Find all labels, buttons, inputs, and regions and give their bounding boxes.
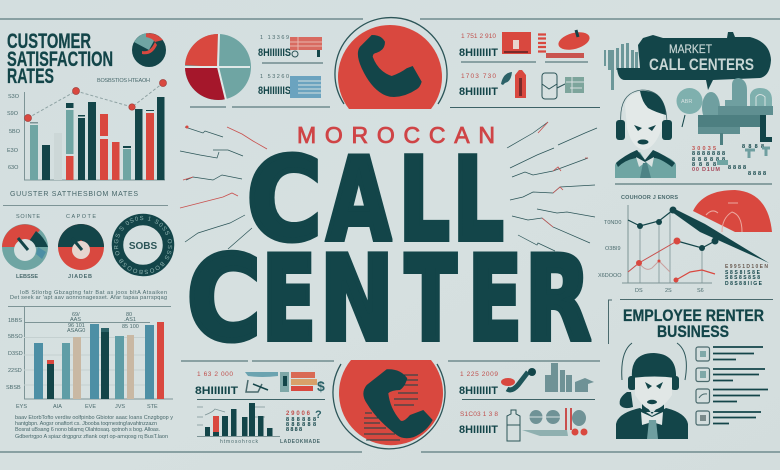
- panel: grouped bar chart: .AS1: [124, 317, 136, 323]
- panel: employee renter business: [608, 300, 773, 439]
- panel: donut charts: SOINTE: [16, 214, 40, 220]
- panel: bottom-right stats: 8HIIIIIIT: [459, 424, 498, 436]
- dot legend: 888888: [286, 417, 316, 423]
- icon: male agent: [615, 90, 676, 178]
- panel: right line chart: E9951D10EN: [725, 264, 768, 270]
- title: Center: C: [187, 232, 261, 367]
- dot legend: 888888: [286, 422, 316, 428]
- panel: donut charts: CAPOTE: [66, 214, 96, 220]
- heading: BUSINESS: [657, 322, 729, 341]
- panel: grouped bar chart: SBSB: [6, 385, 21, 391]
- panel: grouped bar chart: 69/: [72, 312, 80, 318]
- panel: grouped bar chart: EVE: [85, 404, 96, 410]
- panel: grouped bar chart: 85 100: [122, 324, 139, 330]
- speech bubble: MARKET: [669, 42, 713, 56]
- paragraph: Bosrat uBsang 6 nono bilamq Olahtosaq. qotnoh s bog. Alloas.: [15, 427, 160, 433]
- panel: donut charts: [2, 214, 174, 301]
- panel: top pie: [185, 34, 251, 100]
- title: Center: T: [405, 232, 457, 367]
- panel: market call centers: [604, 32, 773, 177]
- panel: grouped bar chart: AIA: [53, 404, 62, 410]
- panel: right line chart: S8S8S8S8: [725, 275, 760, 281]
- legend dots: 8888: [728, 165, 746, 171]
- icon: red cart: [290, 37, 322, 57]
- panel: grouped bar chart: 80: [126, 312, 132, 318]
- panel: grouped bar chart: 96 101: [68, 323, 85, 329]
- icon: bottle and capsules: [507, 408, 588, 441]
- bar chart: S9O: [7, 111, 19, 117]
- zigzag accents right: [507, 122, 597, 251]
- panel: top-left stats: 8HIIIIIIS: [258, 47, 291, 59]
- checklist: [696, 347, 768, 425]
- title: Call: A: [327, 134, 390, 266]
- title: Center: E: [468, 232, 522, 367]
- title: Call: L: [453, 134, 503, 266]
- panel: right line chart: 2S: [665, 288, 672, 294]
- panel: bottom-right stats: S1C03 1 3 8: [460, 411, 498, 418]
- title: Center: R: [525, 232, 591, 367]
- paragraph: hantgbpn. Aogsr onaftort cs. Jbooba toqrnestng!avahtnzzazn: [15, 421, 157, 427]
- icon: red card: [502, 32, 531, 54]
- heading: SATISFACTION: [7, 48, 113, 71]
- panel: grouped bar chart: EYS: [16, 404, 27, 410]
- icon: top phone badge: [335, 18, 447, 109]
- legend dots: 8888: [742, 144, 764, 150]
- red gauge: [693, 190, 772, 232]
- text block: Det seek ar 'apt aav aonnonagesset. Afar tapaa parrspqag: [10, 295, 167, 301]
- speech bubble: CALL CENTERS: [649, 55, 754, 74]
- skyline: [604, 43, 638, 90]
- ring with total: [112, 214, 174, 276]
- icon: bottle: [501, 70, 526, 98]
- teal machinery: ABR: [681, 99, 692, 105]
- panel: right line chart: S8S8IS8E: [725, 270, 761, 276]
- title: Call: C: [247, 134, 322, 266]
- mini bar chart: [197, 403, 321, 445]
- title: Moroccan: MOROCCAN: [297, 122, 495, 148]
- panel: top-right stats: [450, 29, 600, 108]
- panel: right line chart: [598, 190, 772, 294]
- mini bar chart: LADEOKMADE: [280, 439, 321, 445]
- icon: machine: [245, 372, 325, 394]
- panel: grouped bar chart: 5BSO: [8, 334, 23, 340]
- legend dots: 3 0 0 3 5: [692, 146, 716, 152]
- dot legend: 8888: [286, 427, 302, 433]
- panel: grouped bar chart: D3SD: [8, 351, 23, 357]
- title: Center: E: [262, 232, 316, 367]
- panel: grouped bar chart: STE: [147, 404, 158, 410]
- icon: small pie: [132, 33, 166, 67]
- heading: CUSTOMER: [7, 30, 91, 53]
- ring with total: SOBS: [129, 241, 157, 252]
- bar chart: [7, 80, 166, 180]
- mini bar chart: htmosohrock: [220, 439, 258, 445]
- donut 1: [2, 224, 48, 270]
- panel: right line chart: S6: [697, 288, 704, 294]
- legend dots: 8888: [748, 171, 766, 177]
- icon: handset and skyline: [501, 363, 594, 392]
- speech bubble: [617, 32, 771, 90]
- paragraph: baav EtorbTofto verdiw oolfpinbo Gbiotor aaac loans Cnzgbgop y: [15, 415, 173, 421]
- panel: top-right stats: 8HIIIIIIT: [459, 86, 498, 98]
- panel: right line chart: X6DOOO: [598, 273, 622, 279]
- icon: red dish: [546, 29, 592, 58]
- text block: loB Stlorbg Gbzagtng fatr Bat as joos bItA Atsaiken: [20, 290, 167, 296]
- panel: bottom-right stats: [448, 361, 600, 441]
- icon: machine: $: [317, 378, 325, 394]
- dot legend: ?: [315, 409, 322, 421]
- panel: grouped bar chart: [6, 306, 173, 410]
- panel: right line chart: O3BI9: [605, 246, 621, 252]
- panel: bottom-right stats: 1 225 2009: [460, 371, 498, 378]
- panel: bottom-left stats: 1 63 2 000: [197, 371, 233, 378]
- title: Center: N: [320, 232, 394, 367]
- bar chart: S3O: [8, 94, 20, 100]
- icon: red stripes: [538, 34, 546, 52]
- zigzag accents left: [180, 126, 267, 249]
- dot legend: [286, 409, 322, 433]
- panel: top-right stats: 1703 730: [461, 73, 496, 80]
- panel: bottom-left stats: [181, 361, 334, 445]
- panel: customer satisfaction rates: [7, 30, 166, 198]
- teal machinery: [676, 78, 773, 145]
- panel: grouped bar chart: 1BBS: [8, 318, 22, 324]
- panel: right line chart: D8S88IIGE: [725, 281, 763, 287]
- panel: grouped bar chart: JVS: [115, 404, 125, 410]
- title: Call: L: [399, 134, 449, 266]
- panel: bottom-right stats: 8HIIIIIIT: [459, 385, 498, 397]
- panel: grouped bar chart: AAS: [70, 317, 81, 323]
- panel: grouped bar chart: 22SD: [8, 368, 22, 374]
- bar chart: 5BO: [9, 129, 21, 135]
- title: Center: [187, 232, 592, 367]
- legend dots: 888888: [692, 157, 725, 163]
- dot legend: 2 9 0 0 6: [286, 411, 311, 417]
- title: Call: [247, 134, 504, 266]
- bar chart: 63O: [8, 165, 19, 171]
- paragraph: Gdbertrgpo A spiaz drgpgnz zfiank oqrt op-amqosg rq BusT.laon: [15, 434, 168, 440]
- bar chart: E3O: [7, 148, 19, 154]
- panel: top-right stats: 1 751 2 910: [461, 33, 496, 40]
- panel: right line chart: COUHOOR J ENORS: [621, 195, 678, 201]
- panel: top-left stats: 1 13369: [260, 35, 289, 41]
- panel: top-right stats: 8HIIIIIIT: [459, 47, 498, 59]
- chart caption: GUUSTER SATTHESBIOM MATES: [10, 191, 138, 198]
- panel: donut charts: JIADEB: [68, 274, 92, 280]
- panel: top-left stats: [190, 35, 330, 107]
- legend dots: [692, 144, 766, 177]
- panel: top-left stats: 8HIIIIIIS: [258, 85, 291, 97]
- text block: [10, 290, 167, 301]
- heading: RATES: [7, 65, 54, 88]
- caption: BOSBSTIOS HTEAOH: [97, 78, 150, 84]
- icon: bottom phone badge: [333, 360, 445, 449]
- panel: right line chart: T0ND0: [604, 220, 621, 226]
- legend dots: 8888: [692, 162, 716, 168]
- icon: blue table: [290, 76, 321, 98]
- legend dots: 00 D1UM: [692, 167, 720, 173]
- donut 2: [58, 224, 104, 270]
- panel: top-left stats: 1 53260: [260, 74, 289, 80]
- heading: [623, 306, 764, 341]
- icon: female agent: [616, 343, 688, 439]
- panel: right line chart: DS: [635, 288, 643, 294]
- paragraph: [15, 415, 173, 440]
- icon: wire device: [542, 73, 584, 99]
- panel: bottom-left stats: 8HIIIIIIT: [195, 385, 238, 397]
- legend dots: 8888888: [692, 151, 725, 157]
- heading: [7, 30, 113, 88]
- panel: grouped bar chart: ASAG0: [67, 328, 85, 334]
- panel: donut charts: LEBSSE: [16, 274, 38, 280]
